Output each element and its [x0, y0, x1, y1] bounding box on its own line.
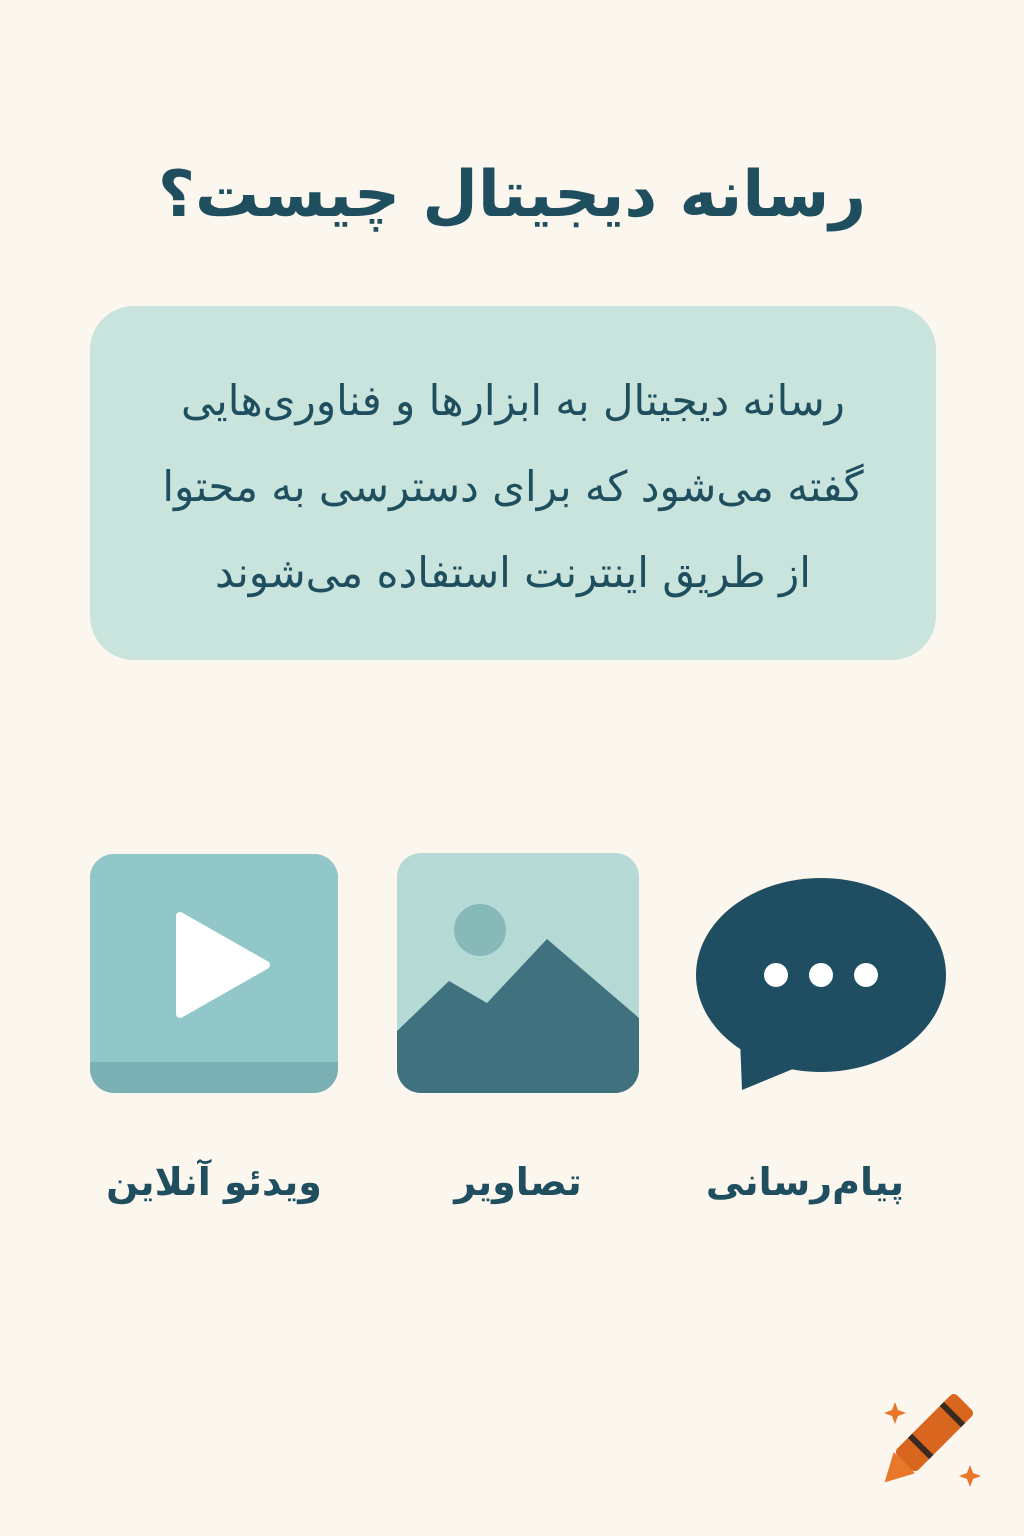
text block: definition: از طریق اینترنت استفاده می‌شوند	[215, 548, 811, 597]
text block: definition: رسانه دیجیتال به ابزارها و فناوری‌هایی	[181, 376, 845, 425]
text block: definition: گفته می‌شود که برای دسترسی به محتوا	[162, 462, 864, 511]
panel: definition	[90, 306, 936, 660]
text block: definition	[162, 376, 864, 598]
icon: crayon	[884, 1394, 981, 1487]
label: images: تصاویر	[454, 1160, 582, 1204]
label: video: ویدئو آنلاین	[106, 1160, 322, 1204]
icon: video	[90, 854, 338, 1093]
label: messaging: پیام‌رسانی	[706, 1160, 904, 1204]
icon: image	[397, 853, 639, 1093]
icon: chat bubble	[696, 878, 946, 1090]
title: رسانه دیجیتال چیست؟	[158, 158, 866, 232]
